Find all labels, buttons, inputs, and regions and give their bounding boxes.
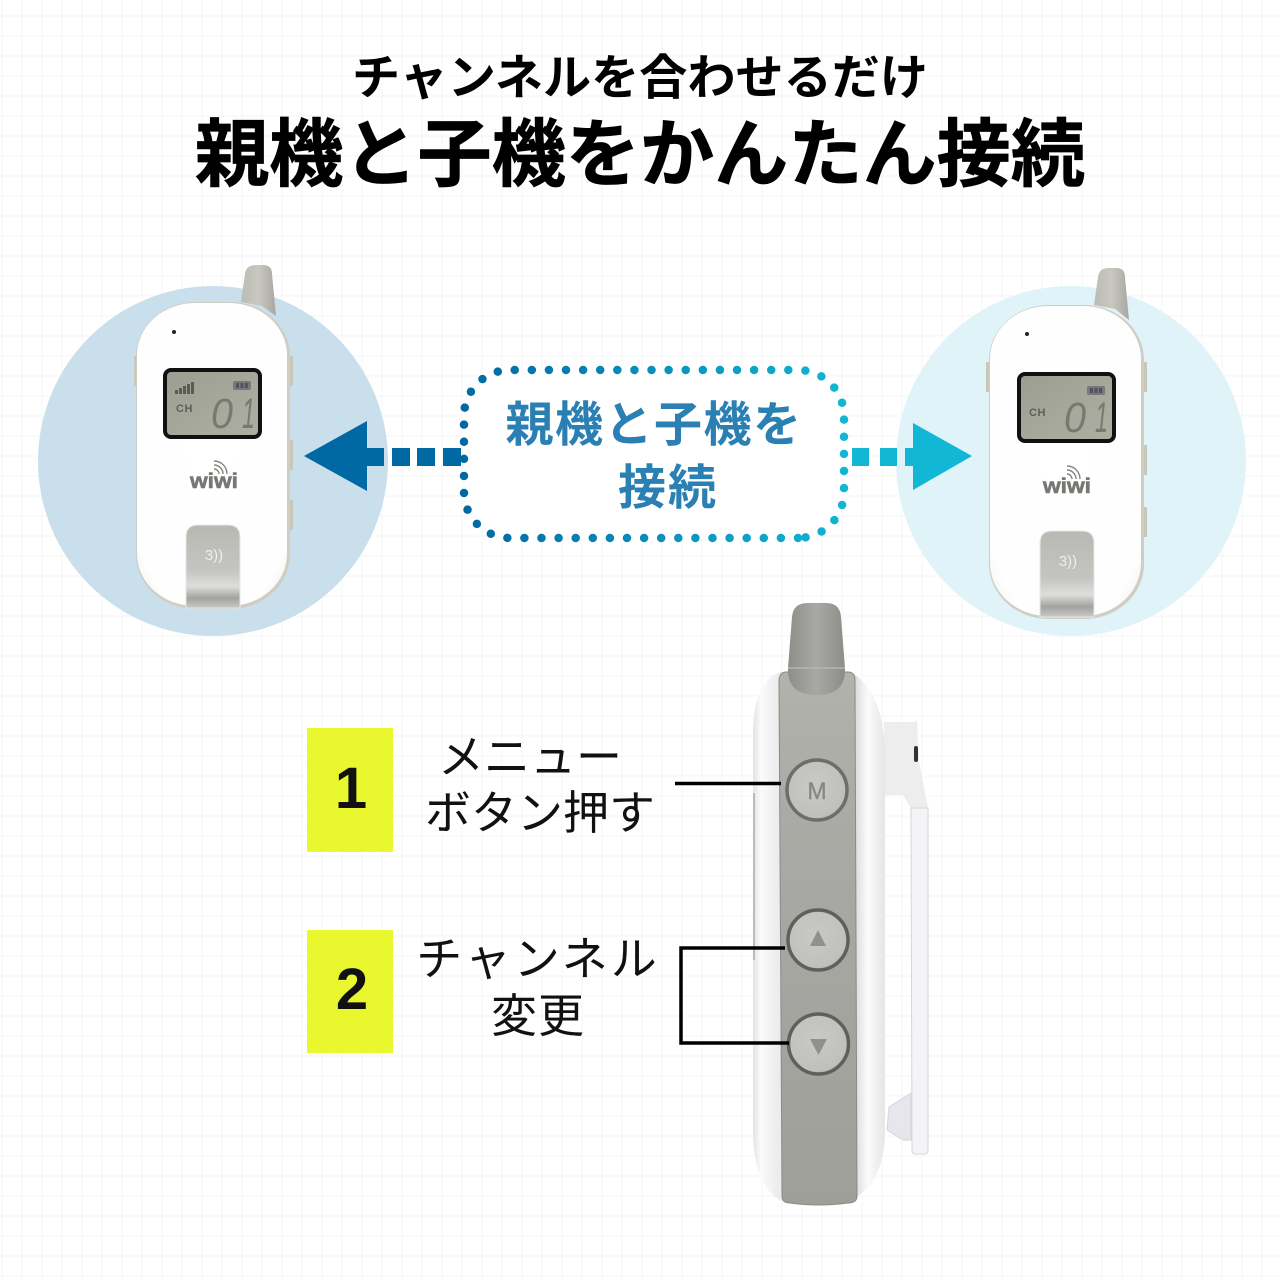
subtitle line: チャンネルを合わせるだけ	[352, 38, 928, 108]
step badge 2	[307, 930, 393, 1053]
side buttons	[986, 362, 1147, 537]
LCD screen	[1019, 374, 1114, 442]
icon: device side view	[753, 603, 928, 1205]
button: down	[788, 1014, 848, 1074]
callout text: 親機と子機を	[505, 385, 803, 455]
body shell	[753, 672, 885, 1201]
logo	[1042, 466, 1091, 498]
leader line: menu button	[675, 782, 781, 785]
metal clip tab	[1040, 531, 1094, 617]
clip lower hinge	[887, 1093, 911, 1140]
channel number: 0	[1064, 394, 1086, 442]
step badge 2: 2	[336, 957, 368, 1022]
icon: parent device front view	[134, 265, 293, 609]
arrow: to parent device	[304, 421, 461, 491]
left seam	[753, 793, 755, 960]
icon: child device front view	[986, 268, 1147, 619]
battery	[233, 381, 251, 390]
step 2 text: チャンネル	[416, 923, 660, 989]
antenna	[788, 603, 845, 695]
device body rim	[989, 305, 1144, 619]
channel label: CH	[176, 403, 193, 415]
step 1 text	[425, 721, 655, 843]
indicator dot	[1025, 332, 1029, 336]
callout: connect parent and child	[464, 370, 844, 538]
button: menu	[787, 760, 847, 820]
antenna	[241, 265, 276, 316]
metal clip tab: 3))	[205, 547, 223, 564]
step 1 text: メニュー	[438, 721, 622, 787]
panel: child device circle	[896, 286, 1246, 636]
metal clip tab: 3))	[1059, 553, 1077, 570]
logo	[189, 461, 238, 493]
logo: wiwi	[1042, 475, 1091, 498]
leader bracket: channel buttons	[681, 948, 789, 1043]
channel number	[1064, 394, 1108, 442]
main heading: 親機と子機をかんたん接続	[195, 95, 1085, 202]
LCD screen	[165, 370, 260, 438]
channel number: 0	[211, 390, 233, 438]
logo: wiwi	[189, 470, 238, 493]
channel number: 1	[242, 390, 255, 438]
button: menu: M	[808, 778, 826, 805]
clip upper mount	[884, 720, 928, 808]
signal bars	[175, 382, 194, 394]
battery	[1087, 386, 1105, 395]
panel: parent device circle	[38, 286, 388, 636]
channel label: CH	[1029, 407, 1046, 419]
antenna collar seam	[788, 667, 845, 669]
belt clip	[884, 720, 928, 1154]
title	[195, 38, 1085, 202]
indicator dot	[172, 330, 176, 334]
side buttons	[134, 356, 293, 530]
callout text: 接続	[618, 448, 718, 518]
dotted border	[464, 370, 844, 538]
clip bar	[911, 808, 928, 1154]
step badge 1: 1	[335, 756, 367, 821]
clip slot	[914, 746, 918, 762]
step 2 text	[416, 923, 660, 1046]
metal clip tab	[186, 525, 240, 608]
step 2 text: 変更	[491, 980, 585, 1046]
device body	[137, 303, 287, 606]
channel number	[211, 390, 255, 438]
button: up	[788, 910, 848, 970]
device body rim	[136, 302, 290, 609]
callout text	[505, 385, 803, 518]
arrow: to child device	[852, 423, 972, 490]
step 1 text: ボタン押す	[425, 777, 655, 843]
antenna	[1094, 268, 1129, 320]
channel number: 1	[1095, 394, 1108, 442]
gray band	[779, 672, 857, 1205]
device body	[990, 306, 1141, 616]
step badge 1	[307, 728, 393, 852]
